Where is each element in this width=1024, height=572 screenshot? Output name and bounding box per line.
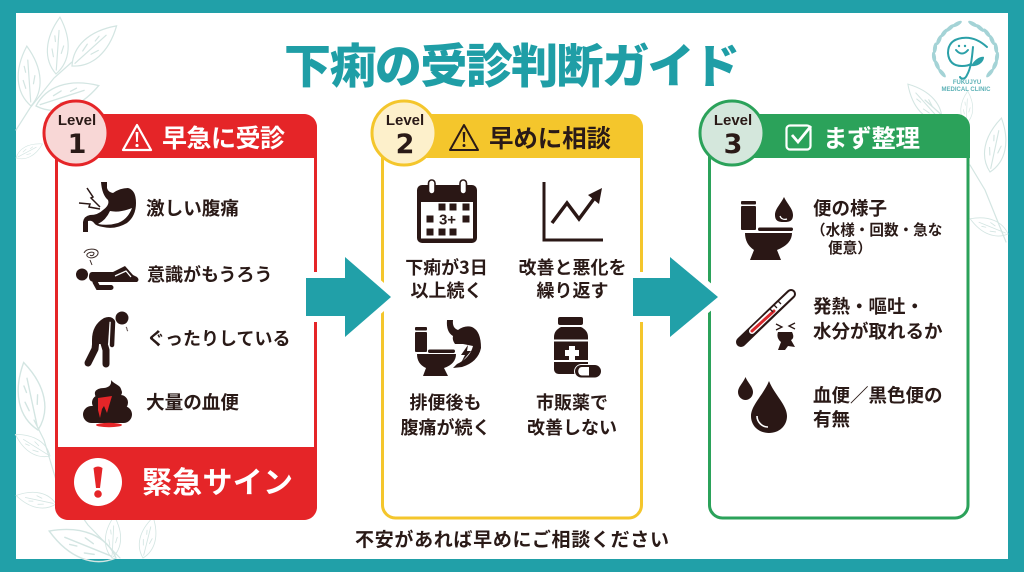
logo laurel [931, 20, 1000, 78]
title: 下痢の受診判断ガイド [284, 28, 740, 97]
arrow: level 1 to level 2 [306, 257, 391, 337]
icon: thermometer and face [741, 294, 795, 350]
item: heavy bloody stool [83, 380, 239, 427]
item: severe abdominal pain [79, 182, 239, 232]
footer band [55, 447, 317, 520]
item: limp [88, 312, 290, 364]
label line 2: 以上続く [410, 277, 482, 303]
card header [55, 114, 317, 158]
level badge: 1 [68, 129, 86, 160]
checkbox icon [786, 126, 811, 150]
logo leaf [971, 57, 984, 66]
logo text: FUKUJYU [953, 80, 981, 86]
decorative leaves: bottom left [11, 360, 161, 570]
icon: toilet and drop [741, 197, 793, 260]
card frame [56, 116, 316, 518]
icon: line chart [544, 182, 603, 240]
panel: level 2 [372, 101, 643, 518]
level badge: 2 [396, 129, 414, 160]
item: repeated improvement and worsening [518, 182, 626, 303]
label: 便の様子 [813, 195, 887, 221]
card frame [382, 116, 642, 518]
item: pain continues after stool [400, 320, 490, 440]
item: bloody or black stool [738, 377, 943, 433]
item: fever, vomiting, hydration [741, 293, 943, 350]
label line 2: 水分が取れるか [813, 318, 943, 344]
arrow: level 2 to level 3 [633, 257, 718, 337]
detail line 2: 便意） [828, 237, 872, 258]
level badge: 3 [724, 129, 742, 160]
header text: 早めに相談 [489, 120, 611, 155]
panel: level 1 [44, 101, 317, 520]
decorative leaves: right [967, 116, 1011, 242]
item: drowsy consciousness [76, 249, 272, 288]
icon: lying person [76, 249, 138, 288]
item: stool appearance [741, 195, 942, 260]
warning icon [450, 125, 478, 150]
level badge: Level [58, 112, 96, 129]
label: 大量の血便 [146, 388, 239, 415]
label line 2: 改善しない [527, 414, 617, 440]
level badge: Level [386, 112, 424, 129]
label: 発熱・嘔吐・ [813, 293, 924, 319]
header text: 早急に受診 [162, 119, 285, 155]
card frame [710, 116, 968, 518]
logo mark [948, 38, 987, 79]
decorative leaves: top right [901, 78, 974, 128]
label: 血便／黒色便の [813, 382, 943, 408]
decorative leaves: top left [13, 16, 124, 163]
header text: まず整理 [823, 120, 920, 155]
icon: stool with blood [83, 380, 132, 427]
logo text line 2: MEDICAL CLINIC [942, 87, 991, 93]
label: 激しい腹痛 [146, 194, 239, 221]
icon: calendar: 3+ [439, 212, 456, 228]
icon: drops [738, 377, 787, 433]
label: ぐったりしている [147, 325, 290, 351]
item: OTC medicine does not help [527, 317, 617, 440]
bottom note: 不安があれば早めにご相談ください [355, 525, 669, 552]
detail line 1: （水様・回数・急な [811, 219, 942, 240]
level badge [44, 101, 108, 165]
label: 市販薬で [536, 389, 608, 415]
level badge [372, 101, 436, 165]
icon: stomach [79, 182, 136, 232]
icon: bent person [88, 312, 128, 364]
card header [381, 114, 643, 158]
label: 意識がもうろう [147, 261, 272, 287]
item: lasts 3+ days [405, 180, 488, 303]
icon: toilet and stomach [415, 320, 481, 376]
label line 2: 腹痛が続く [400, 414, 490, 440]
card header [708, 114, 970, 158]
clinic logo [931, 20, 1000, 93]
label: 排便後も [410, 389, 482, 415]
icon: exclamation [74, 458, 122, 506]
panel: level 3 [700, 101, 970, 518]
label: 改善と悪化を [518, 254, 626, 280]
label line 2: 繰り返す [536, 277, 608, 303]
level badge: Level [714, 112, 752, 129]
logo eyes [958, 45, 966, 47]
warning icon [123, 125, 151, 150]
label line 2: 有無 [813, 406, 850, 432]
icon: medicine bottle [554, 317, 602, 379]
footer text: 緊急サイン [142, 458, 293, 502]
level badge [700, 101, 764, 165]
label: 下痢が3日 [405, 254, 488, 280]
